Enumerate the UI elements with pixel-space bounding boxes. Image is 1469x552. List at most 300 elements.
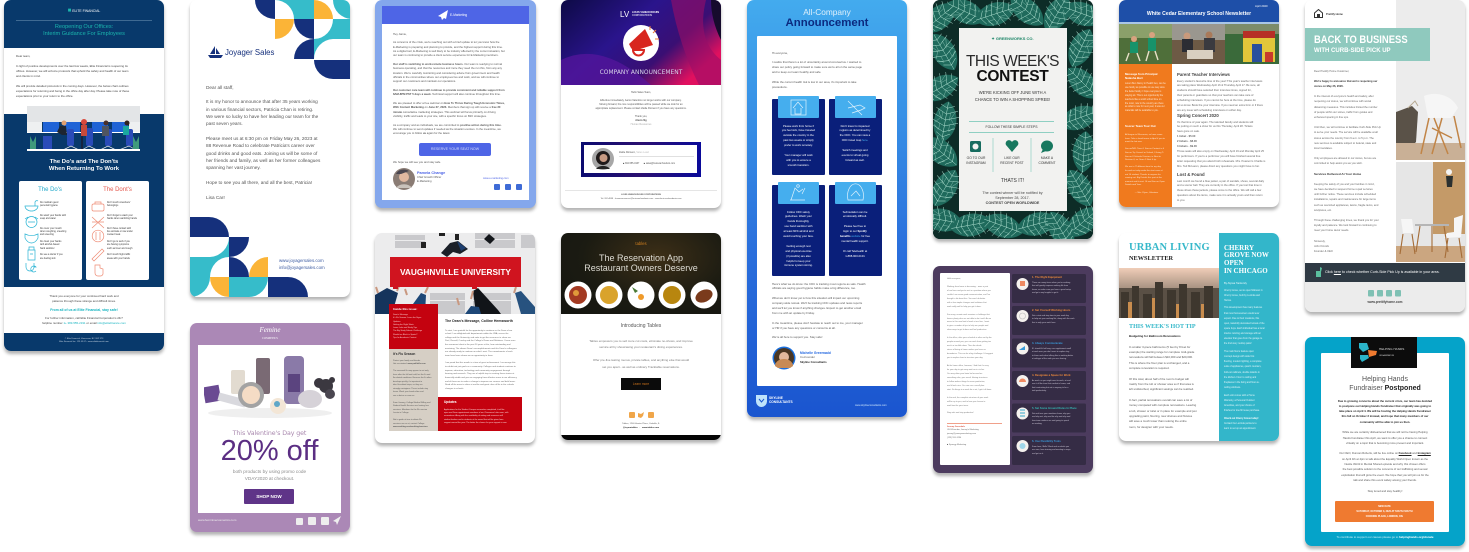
letter text: Working from home is becoming... more a part [947,286,988,288]
tip 3 text: to there and value talking this is working better [1032,355,1073,357]
promo code text [233,469,306,480]
card text: travel: Don't travel to impacted [841,124,869,128]
card text: work from home [772,124,825,169]
sidebar body: Lorem Ben Nancy in Health ben, can be [1125,83,1166,85]
article text: In fact, partial renovations overall can save a lot of [1129,398,1192,402]
step three label: MAKE A [1041,156,1053,160]
card text: hygiene: avoid touching your face. [783,235,814,238]
concert text: 2 tickets - $8.00 [1177,140,1197,143]
sidebar body two: Details and Year. [1125,184,1141,186]
letter body [756,36,897,386]
intro text: offices. However, we will enforce protocols that uphold the safety and health of our team [16,69,128,73]
closing highlight: From all of us at Elite Financial, stay safe! [50,308,118,312]
card text: work from home: past two weeks or simply [783,139,814,142]
list: do's: with alcohol-based [40,244,59,246]
title: THIS WEEK'S [966,53,1059,70]
logo: Feminine Cosmetics: Femine [260,326,280,334]
closing text: In the meantime, please don't hesitate to reach out to me, your manager [772,321,863,325]
icons: social [1368,290,1402,297]
letter text: in various financial sectors, Patricia Chan is retiring. [206,107,313,112]
lost and found text: these shoes these jackets, please come to the office. We will call a few [1177,189,1261,192]
closing text: or HR if you have any questions or concerns at all. [772,326,836,330]
tip 2 text: that is only your work here. [1032,322,1056,324]
new date box: COOKING PLACE, LONDON, ON. [1366,515,1403,518]
lost and found text: to you. [1177,199,1185,202]
tip 2 text: to help set your working life, along with the work [1032,318,1074,320]
discount: 20% off [221,435,318,467]
divider: header rule [16,20,152,21]
title emphasis: Announcement [786,17,868,29]
letter text: stores across the country from 9 a.m. to 5 p.m. The [1314,137,1374,140]
sidebar body two: — Mrs. Flynn, Volunteer [1135,192,1158,194]
article text: Of this total, about half of the room's budget will [1129,377,1189,381]
concert text: be putting on such a show for us this Thursday, April 28. Tickets [1177,125,1253,128]
letter text: Hope to see you all there, and all the best, Patricia! [206,180,312,185]
card text: hygiene: Getting enough rest [786,245,811,248]
icons: social [296,516,341,525]
tip 3 text: a tool-type of the work you are sharing. [1032,358,1067,360]
closing text: Thank you everyone for your continued hard work and [49,294,119,298]
column text: Contact the Lucinda partners to [1224,423,1256,425]
letter text: In the end, the complete structure of your work [947,397,988,399]
updates text: support around the year. The better the chance for your support is new. [444,422,507,424]
logo: paper plane [438,10,448,20]
terms text: The contest winner will be notified by [982,190,1043,194]
heading: Helping Hands [1362,376,1408,383]
list: don'ts: Don't touch coworkers' [107,202,130,204]
card text: wellbeing: Please feel free to [844,225,866,228]
flu text: The seasonal flu may appear to not only [393,370,429,372]
heading: White Cedar Elementary School Newsletter [1147,11,1251,17]
website: www.e-marketing.com [483,177,509,180]
signature [800,350,831,364]
title banner [390,257,521,287]
footer bar [561,435,721,440]
intro text: I realize that there's a lot of uncertainty around coronavirus. I wanted to [772,60,861,64]
article text [445,330,517,390]
card text: travel: regions as determined by [840,129,870,132]
sidebar body two: Soccer Tip Council or School, I Going T- [1125,152,1164,154]
panel: Prettify Home back to business email [1305,0,1465,312]
subtitle: WE'RE KICKING OFF JUNE WITH A [979,90,1046,94]
body text: Moving forward, his core responsibilities will be passed while we look for an [599,103,683,106]
card text: hygiene: Follow CDC safety [787,210,810,214]
lost and found text [1177,180,1264,204]
letter text: We're happy to announce that we're reopening our [1314,80,1377,83]
signature: Skyline Consultants [800,360,827,364]
letter text: something else, your email. Having structures [947,377,987,379]
step two label: RECENT POST [1000,160,1024,164]
column text: fold-out cabinets, double islands in [1224,372,1260,374]
panel: E-Marketing email [375,0,536,208]
article text: the enormous talent in the past 50 years at the, from outstanding and [445,344,510,346]
letter text: Stay safe and stay productive! [947,412,974,414]
flu text: flu-related conditions. Because the flu often [393,377,431,379]
list: don'ts: Don't forget to wash your [107,215,133,217]
footer url: www.femininecosmetics.com [198,518,236,522]
terms text: September 28, 2017. [995,196,1030,200]
letter text: and it feels nice. You can use a small plan: [947,385,985,387]
article text [1129,344,1196,430]
concert text: have gone on sale. [1177,130,1200,133]
list: do's: Do clean your hands [40,241,61,243]
letter text: you to explore how to structure your day. [947,357,983,359]
address: Tables, 1240 Hunter Place, Oakville, IL [622,423,660,425]
tip 6: 6. Use Flexibility Tools [1032,440,1061,443]
logo text: HELPING HANDS [1379,347,1404,351]
letter text: much or too little done. Then the whole [947,345,981,347]
icons: social [494,184,522,190]
button: reserve seat: RESERVE YOUR SEAT NOW [431,147,479,151]
letter text: the best possible solution to the concerns of our trafficking and sexual [1343,468,1427,471]
illustration: office workers [27,106,140,151]
letter text: As concerns of the crisis, we're reaching out with a brief update to let you know how the [393,41,499,44]
letter text: past seven years. [206,121,243,126]
signature: Pamela Change [417,171,445,175]
article text: college and the University, and unite to get the resources to share our [445,337,511,339]
icons: don'ts [92,202,104,276]
letter text: enhanced spacing in line ups. [1314,116,1349,119]
sidebar body two: moment and it next. Of and Soccer Open [1125,181,1165,183]
heading: Reopening Our Offices: [55,24,113,30]
flu text: strongly contagious. These include stay [393,388,428,390]
tip 4 text: find contrasting but not in anyway to be a [1032,387,1068,389]
letter text: At the home office, however, I find that it's easy [947,365,989,367]
body text: Thank you, [635,115,647,118]
intro text [16,54,130,98]
panel: the do's [18,180,82,280]
letter text: For many, remote work remains a challenge that [947,314,990,316]
sidebar: orange column [1119,64,1172,207]
letter text: location. We're carefully monitoring and considering advice from government and health [393,72,500,75]
letter text: We were so lucky to have her leading our team for the [206,114,318,119]
tip 3 text: If I should fit half way, can supplement small [1032,348,1071,350]
column text: that most homeowners would ever [1224,313,1259,315]
column heading: OPEN [1224,259,1243,267]
column text: The main floors feature open [1224,351,1254,353]
list: don'ts: Don't have contact with [107,228,131,230]
card text: wellbeing: login to our Spotify [843,230,867,233]
navy section [4,114,164,287]
sidebar list: Tips for Academic Contest [393,337,416,339]
signature card [581,142,701,177]
button: shop now [244,489,294,504]
hero heading: Restaurant Owners Deserve [584,263,698,273]
tip 2 text: Set a start and stop time to your work day [1032,315,1069,317]
list: do's: personal hygiene [40,205,58,207]
panel: All-Company Announcement email [747,0,907,417]
step icons [958,136,1067,174]
card text: hygiene: immune system strong. [784,264,813,267]
article text: to exhibit not just goals as a community. Colleges and students continue to [445,366,516,368]
card text: work from home: you feel sick, have traveled [782,129,815,132]
new date box: SATURDAY, OCTOBER 3, 2020 AT SOUTH SOUTH [1356,510,1413,513]
flu text: vaccines. Members for the Flu vaccine [393,408,427,410]
hero heading: The Reservation App [599,253,683,263]
logo: tables: tables [635,241,647,246]
card text: hygiene [772,210,825,269]
column heading: IN CHICAGO [1224,267,1268,275]
info card: travel [828,99,882,175]
button: learn more [621,378,661,390]
column text: flooring, modern lighting, a complete [1224,361,1262,363]
lower pattern [190,217,308,297]
call to action text: Click here to check whether Curb-Side Pick Up is available in your area. [1325,270,1439,274]
sidebar heading: Inside this issue: [393,307,417,311]
letter text: Hello everyone, [947,278,961,280]
body text: set you apart - as well as ordinary Tracktable reservations. [602,365,680,369]
article: parent teacher interviews: Parent Teacher Interviews [1177,72,1230,77]
column text [1224,288,1265,435]
panel: Greenworks contest email [933,0,1093,239]
sidebar list: The Big Study Debate Challenge [393,330,422,332]
body text [595,90,687,126]
offer line: This Valentine's Day get [233,430,306,437]
article text: changes to schools. [445,388,464,390]
sidebar list: Should we Block in Sports? [393,334,417,336]
sidebar body two: out 10 student. Thanks to anyone for [1125,174,1161,176]
logo: Feminine Cosmetics [260,326,280,340]
letter text: show ways to get it done and feel productive. [947,329,987,331]
title banner [1305,28,1430,61]
intro text: and clients in mind. [16,74,41,78]
letter text: As a digital tool, E-Marketing is well likely to be industry affected by the current situation, but [393,50,505,53]
promo code text: VDAY2020 at checkout. [245,476,294,480]
sidebar body two: meet the hot was. [1125,141,1142,143]
list: don'ts: cooked meat [107,234,120,236]
letter text: to give a number of tips to help our people and [947,325,988,327]
letter text: will be up to you, and to how you choose to [947,401,985,403]
subtitle [958,88,1067,102]
letter text: With Content Marketing on June 27, 2023. Members that sign up will receive a free 30 [393,106,500,109]
letter text: In the interest of everyone's health and safety, after [1314,95,1374,98]
sidebar body: as what to now for next year, it was our [1125,106,1165,108]
intro text: In light of positive developments over the last few weeks, Elite Financial is reopening its [16,64,128,68]
button: shop now: SHOP NOW [256,494,282,499]
card text: work from home: smooth transition. [788,164,809,167]
letter text: encourage you to follow us again for the latest. [393,132,450,135]
article text: a tub, shower or toilet or in place for example and just [1129,409,1196,413]
photos: interiors [1396,0,1465,263]
column text: expect. Due to their creations, this [1224,318,1259,320]
sidebar list [393,314,422,339]
card text: travel: the CDC. You can view a [840,134,870,137]
intro text: We will provide detailed protocols in the coming days. However, the below chart outlines [16,84,129,88]
sidebar body two: All league in Wisconsin, so have come [1125,134,1162,136]
icon: ship [208,46,223,58]
letter text: take place on April 4. We will be hosting the Helping Hands Fundraiser [1339,410,1431,413]
button: learn more: Learn more [633,382,649,386]
column text: concept design with wide first [1224,356,1254,358]
article subheading: Budgeting for Bathroom Renovations [1129,334,1181,338]
icons: do's [24,200,38,272]
letter text [1314,68,1381,254]
column text: Amenities, and your choice of [1224,405,1255,407]
column text: Each unit comes with a Home [1224,395,1255,397]
letter text: Keeping the safety of you and your families in mind, [1314,183,1374,186]
hotline text [42,316,126,325]
photo: bath products [204,356,335,418]
letter text: It is my honor to announce that after 35 years working [206,99,318,104]
letter text: people around you, you can work from getting too [947,341,991,343]
card text: wellbeing: mental health support. [841,240,869,243]
letter text: John Kinnick [1314,245,1329,248]
sidebar body two: have. Take a head teams in April if you to [1125,138,1165,140]
letter text: Through these challenging times, we thank you for your [1314,219,1379,222]
terms text [958,190,1067,206]
food plates [564,282,718,308]
article: spring concert: Spring Concert 2020 [1177,113,1219,118]
letter text: community will be able to join us then. [1360,421,1410,424]
letter text: loyalty and patience. We look forward to continuing to [1314,224,1376,227]
letter text: Our customer care team will continue to provide consistent and reliable support from [393,89,505,92]
footer rule [565,190,717,191]
card text: hygiene: use hand sanitizer with [784,225,812,228]
list: don'ts: belongings [107,205,118,207]
signature: E-Marketing [417,180,432,183]
flu text: Get vaccinated. www.publicflu.com [393,363,426,365]
letter text [947,278,993,416]
tip 1: 1. The Right Equipment [1032,276,1062,279]
section heading: The Do's and The Don'ts [50,159,118,165]
logo: Greenworks: ✦ GREENWORKS CO. [991,36,1034,41]
updates text: renovations. Along with the availability of writing and resources will [444,415,503,417]
card text: hygiene: helpful to keep your [786,260,810,263]
avatar [772,346,796,370]
concert text: Mrs. Ted McLaren, please direct any questions you might have to her. [1177,165,1260,168]
column text: suite of appliances, quartz counters, [1224,366,1261,368]
sidebar text: soccer: Soccer Team Tour Out [1125,124,1156,128]
contact links: info@joyagersales.com [279,265,325,270]
column heading [1224,244,1269,275]
title emphasis: CONTEST [977,68,1048,85]
sidebar text: principal message: Message from Principal [1125,72,1157,76]
panel: Helping Hands fundraiser email [1305,337,1465,546]
article text: mainly from the tub or shower area so if that area is [1129,382,1194,386]
card text: work from home: Please work from home if [783,124,814,128]
card text: wellbeing: benefits website for free [840,235,870,238]
panel: Urban Living newsletter [1119,233,1279,441]
footer text: LOUIS VANHOUDOUIN CORPORATIONS [621,194,661,196]
address [561,422,721,430]
list: don'ts: areas with your hands [107,258,130,260]
logo text: CORPORATIONS [632,14,652,17]
card text: wellbeing: emotionally difficult. [843,215,867,218]
date: April 2020 [1255,4,1268,8]
article text: example) the starting range for complete midi-grade [1129,350,1194,354]
letter text: virtually on a topic that is becoming more present and important. [1346,442,1424,445]
tip 5: 5. Set Some Ground Rules In Place [1032,407,1077,410]
tip 4 text: use it all the time that comfort is home, and [1032,383,1070,385]
body text: Tables empowers you to sell more cut costs, eliminate no-shows, and improve [589,338,693,342]
article text: students should have selected their interview times, signed for, [1177,89,1252,92]
concert text: Those seats will also empty on Wednesday, April 19 and Monday April 25 [1177,150,1264,153]
closing line: We hope we will see you and stay safe. [393,161,441,164]
list: do's [40,201,66,260]
that's it: THATS IT! [1001,178,1024,184]
photo: city skyline [1119,268,1219,318]
letter text: of our lives and you're not in a position where you [947,290,991,292]
tip 2: 2. Set Yourself Working Hours [1032,309,1070,312]
tip 1 text: that will greatly improve working life from [1032,285,1068,287]
article text: will save a much lower than redoing the entire [1129,419,1187,423]
flu text: Not to guide at time to obtain Flu [393,419,422,421]
card text: hygiene: and physical exercise [785,250,812,253]
panel: Joyager Sales letter [190,0,350,297]
list: don'ts: live animals or raw under [107,231,133,233]
list: do's: are feeling sick [40,258,56,260]
flu text: see a doctor as soon as. [393,394,415,396]
letter text: Lisa Carr [206,195,225,200]
card text: work from home: prefer to work remotely. [784,144,813,147]
title: All-Company [803,7,851,17]
address: @tryourtables · www.tables.com [623,427,659,429]
terms text: CONTEST OPEN WORLDWIDE [986,201,1039,205]
updates heading: Updates [444,400,457,404]
tip 1 text: and go to any lengths to get it. [1032,292,1059,294]
letter text: Dear all staff, [206,84,234,90]
letter text: we have decided to suspend home repair services [1314,188,1373,191]
letter column [940,273,1010,465]
flu text: have after the fall and cold, but the flu and [393,374,430,376]
article text: In smaller 3-piece bathrooms (5 feet by 8 feet for [1129,344,1190,348]
list: don'ts: hands when sanitizing hands [107,218,137,220]
article text: financially stable and you are engaging from effective areas in our efficiency [445,377,517,379]
letter text [1321,398,1449,494]
tip 4 text: As much as you might want to work, sit and [1032,380,1070,382]
tip 1 text: home, so make sure you have a good setup [1032,289,1071,291]
letter text: 8AM-8PM PST 5 days a week. Technical support will also continue throughout this time. [393,93,501,96]
letter text: Stay tuned and stay healthy! [1368,490,1402,493]
info card: hygiene [772,185,825,276]
flu text: vaccines see us at, contact College [393,422,424,424]
tip 4 text [1032,380,1070,393]
letter text: start. So things in a week for a set, I get it all done. [947,389,992,391]
heading: do's: The Do's [38,186,62,192]
letter text: our team is continuing to provide a client service experience for E-Marketing members. [393,54,498,57]
concert text [1177,120,1265,170]
concert text: for performers. If you're a performer you will have finished several free [1177,155,1260,158]
footer band [4,333,164,351]
card text: hygiene: (if possible) are also [786,255,811,258]
card text: work from home: Your manager will work [784,154,813,157]
letter text: of people within our stores, traffic from guides and [1314,111,1372,114]
closing text: Here's what we do know: the CDC is tracking most regions as safe. Health [772,282,866,286]
sidebar body: use family as possible to use way store [1125,87,1165,89]
sidebar list: Getting the Right Shots [393,324,414,326]
letter text: couldn't use some good communication, and I've [947,294,990,296]
card text: wellbeing: Or call Telehealth at [843,250,867,253]
signature [417,171,446,183]
logo text [632,11,659,17]
tip 6 text [1032,446,1070,456]
article text [1177,80,1263,114]
intro text: expectations prior to your return to the office. [16,94,73,98]
footer text [600,194,682,200]
letter text: Hey Jamie, [393,32,407,36]
contact links [279,258,325,270]
tip 6 text: From here, Skills! Slack and so whole you [1032,446,1069,448]
letter text: As a company and as individuals, we are committed to positive action during this time. [393,124,502,127]
sidebar list: Dean's Message [393,314,408,316]
column text: the 2nd story rooftop patio! [1224,343,1252,345]
tip 5 text [1032,413,1070,426]
lost and found text: Last month we found a blue jacket, a pair of sandals, shoes, several daily [1177,180,1264,182]
letter text: visibility, traffic and leads to your site, with a specific focus on B2C strategies. [393,115,487,118]
footer text: Tel: 202-4898 · humanresources@louisvanhoudouin.com · www.louis-vanhoudouin.com [601,198,681,200]
section heading: Introducing Tables [621,323,661,329]
letter text: Services Delivered At Your Home [1314,172,1361,176]
